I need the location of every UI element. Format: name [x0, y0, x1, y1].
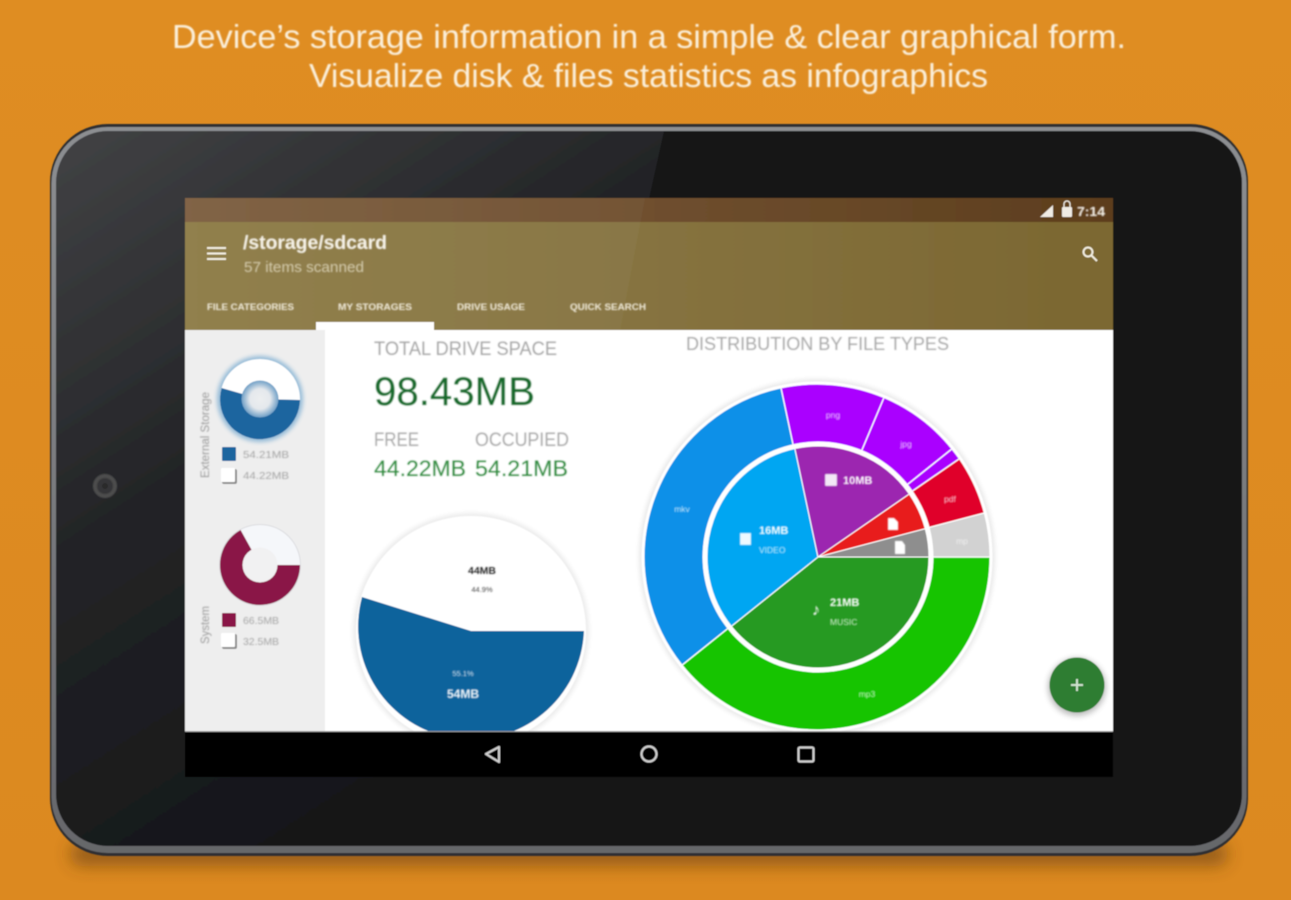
icon: recents [798, 748, 814, 762]
inner ring labels [740, 474, 905, 627]
content area [185, 330, 1113, 731]
outer ring labels: pdf [944, 494, 957, 504]
outer ring [644, 384, 990, 730]
outer ring labels: mp [956, 536, 968, 546]
inner ring labels: ♪ [812, 602, 820, 619]
inner ring labels: 21MB [830, 597, 859, 609]
navigation bar [185, 731, 1113, 777]
title: Device’s storage information in a simple & clear graphical form. [172, 18, 1126, 55]
inner ring [707, 446, 929, 668]
tabs: MY STORAGES [338, 302, 412, 313]
icon: home [642, 746, 656, 762]
tablet device [50, 124, 1248, 866]
app bar title: /storage/sdcard [243, 233, 387, 254]
inner ring labels: 10MB [843, 475, 872, 487]
chart: drive pie: 44MB [468, 565, 496, 577]
panel: drive stats [374, 339, 569, 481]
outer ring labels: png [826, 410, 840, 420]
inner ring labels: MUSIC [830, 617, 857, 627]
tabs: QUICK SEARCH [570, 302, 646, 313]
legend: system [221, 613, 279, 649]
status bar: 7:14 [1077, 204, 1106, 219]
outer ring labels: jpg [899, 439, 912, 449]
heading: total drive space: TOTAL DRIVE SPACE [374, 339, 557, 360]
chart: drive pie: 55.1% [452, 669, 474, 678]
outer ring labels [674, 410, 968, 699]
occupied label: OCCUPIED [475, 430, 569, 451]
icon: search [1084, 248, 1097, 261]
status bar [185, 198, 1113, 222]
legend: system: 66.5MB [243, 615, 279, 627]
button: floating add [1048, 658, 1106, 716]
camera [93, 474, 117, 498]
label: internal storage: External Storage [200, 392, 212, 478]
occupied value: 54.21MB [475, 456, 568, 481]
screen [185, 198, 1113, 777]
title [172, 18, 1126, 94]
inner ring labels: 16MB [759, 525, 788, 537]
inner ring labels: VIDEO [759, 545, 786, 555]
total value: 98.43MB [374, 370, 535, 414]
active tab indicator [316, 322, 434, 331]
panel: storage sidebar [185, 330, 325, 731]
legend: system: 32.5MB [243, 636, 279, 648]
chart: drive pie: 44.9% [471, 585, 493, 594]
tabs: DRIVE USAGE [457, 302, 525, 313]
chart: file type sunburst [639, 379, 995, 735]
icon: menu [207, 248, 226, 259]
tabs [207, 302, 646, 313]
app bar subtitle: 57 items scanned [244, 260, 364, 276]
chart: drive pie: 54MB [447, 687, 479, 701]
system donut [219, 524, 301, 606]
tabs: FILE CATEGORIES [207, 302, 294, 313]
outer ring labels: mkv [674, 504, 691, 514]
app bar [185, 198, 1113, 331]
free value: 44.22MB [374, 456, 466, 481]
chart: drive pie [353, 513, 589, 749]
internal storage donut [217, 356, 303, 442]
legend: internal storage: 44.22MB [243, 470, 289, 482]
label: system: System [200, 606, 212, 644]
legend: internal storage [221, 447, 289, 484]
heading: distribution by file types: DISTRIBUTION BY FILE TYPES [686, 334, 949, 354]
icon: back [486, 747, 499, 762]
title: Visualize disk & files statistics as infographics [309, 57, 988, 94]
legend: internal storage: 54.21MB [243, 449, 289, 461]
free label: FREE [374, 430, 419, 451]
outer ring labels: mp3 [859, 689, 876, 699]
